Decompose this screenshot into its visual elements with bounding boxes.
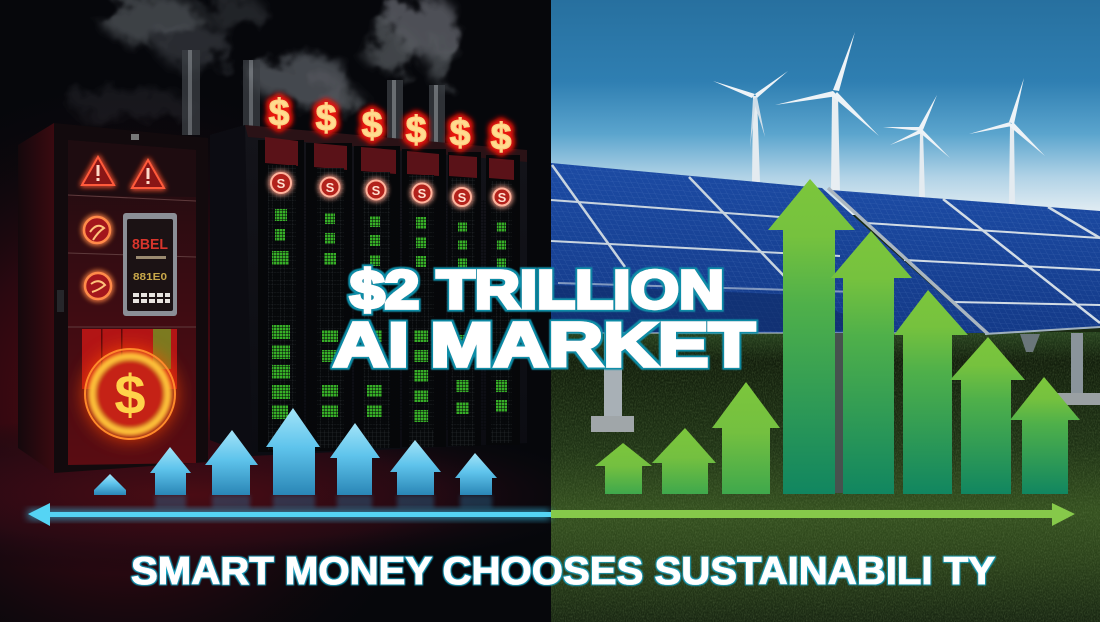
chimneys (182, 50, 445, 145)
glowing dollar signs above the racks: $ (316, 97, 337, 138)
glowing dollar signs above the racks (269, 92, 512, 157)
glowing dollar signs above the racks: $ (269, 92, 290, 133)
turbine 2 (775, 32, 879, 192)
glowing dollar signs above the racks: $ (362, 104, 383, 145)
glowing dollar signs above the racks: $ (450, 112, 471, 153)
panel: left dark data centre background (0, 0, 551, 622)
turbine 4 (969, 78, 1045, 205)
control display: 881E0 (133, 272, 168, 283)
red dollar coin badges: S (458, 190, 467, 205)
solar panel array: right (828, 188, 1100, 334)
icon: burning dollar coin: $ (114, 363, 146, 426)
green status lights (272, 209, 507, 422)
red dollar coin badges (271, 173, 510, 206)
title line 1: $2 TRILLION (350, 260, 724, 320)
wind turbines (713, 32, 1045, 205)
red battery stacks (82, 329, 177, 389)
warning exclamation marks (96, 165, 150, 184)
panel: right sky (551, 0, 1100, 215)
glowing dollar signs above the racks: $ (491, 116, 512, 157)
rising green arrows (595, 179, 1080, 494)
panel: grass field (551, 215, 1100, 622)
red rack top bands (265, 137, 514, 180)
red warning cabinet (18, 123, 208, 473)
turbine 3 (883, 95, 950, 198)
control display (123, 213, 177, 316)
horizontal arrow: right green (551, 503, 1075, 526)
solar panel array: left (551, 163, 985, 333)
glowing dollar signs above the racks: $ (406, 109, 427, 150)
mesh server doors (268, 165, 512, 450)
icon: burning dollar coin (84, 348, 176, 440)
blue arrow reflection (155, 495, 492, 508)
title line 2: AI MARKET (333, 311, 755, 380)
title (333, 260, 755, 380)
red dollar coin badges: S (277, 176, 286, 191)
red dollar coin badges: S (498, 190, 507, 205)
solar panel supports (591, 333, 1100, 493)
red dollar coin badges: S (372, 183, 381, 198)
control display: 8BEL (132, 236, 168, 253)
smoke plumes (70, 0, 459, 121)
icon: glowing circular gauges (84, 217, 111, 299)
turbine 1 (713, 71, 788, 182)
red dollar coin badges: S (326, 180, 335, 195)
tagline: SMART MONEY CHOOSES SUSTAINABILI TY (131, 550, 995, 593)
server rack row (210, 125, 527, 456)
red dollar coin badges: S (418, 186, 427, 201)
icon: warning triangles (82, 157, 164, 188)
rising blue arrows (94, 408, 497, 495)
horizontal arrow: left blue (28, 503, 551, 526)
